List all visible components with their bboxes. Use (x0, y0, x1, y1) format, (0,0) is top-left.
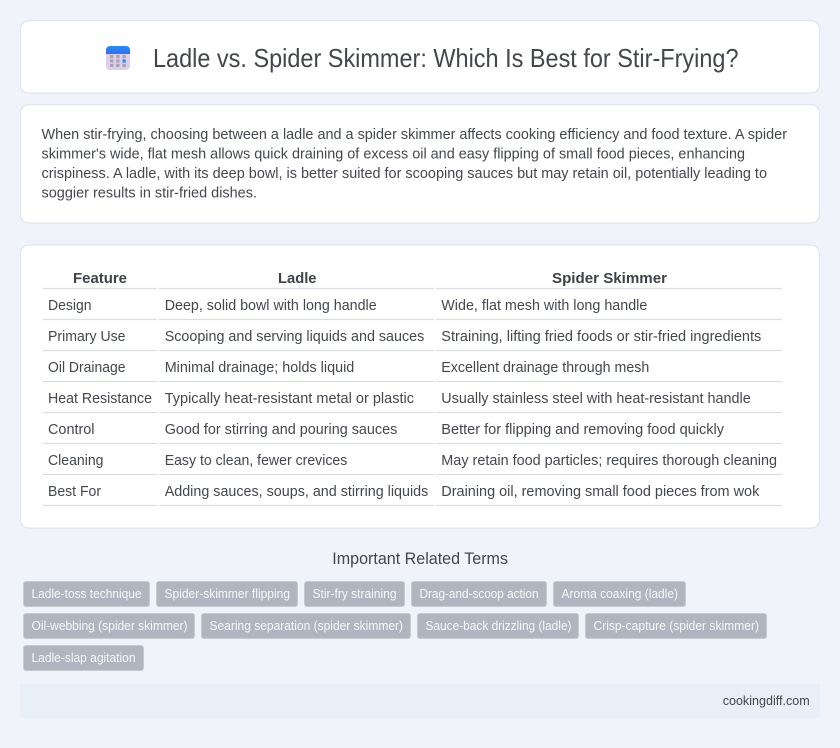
panel: related term tags (24, 582, 766, 670)
table row: best for (48, 484, 760, 500)
table row: cleaning: May retain food particles; requires thorough cleaning (441, 453, 777, 469)
table row: design: Wide, flat mesh with long handle (441, 298, 647, 314)
tag: Ladle-toss technique (32, 587, 142, 601)
table row: cleaning: Easy to clean, fewer crevices (165, 453, 347, 469)
table row: best for: Best For (48, 484, 101, 500)
footer (20, 684, 820, 718)
text block: introduction paragraph: When stir-frying, choosing between a ladle and a spider skimmer affects cooking efficiency and food texture. A spider (42, 127, 787, 143)
tag (586, 614, 766, 638)
table row: heat resistance: Usually stainless steel with heat-resistant handle (441, 391, 751, 407)
tag: Searing separation (spider skimmer) (210, 619, 403, 633)
table row: cleaning: Cleaning (48, 453, 104, 469)
tag: Oil-webbing (spider skimmer) (32, 619, 188, 633)
text block: introduction paragraph: skimmer's wide, flat mesh allows quick draining of excess oil and easy flipping of small food pieces, enhancing (42, 146, 745, 162)
table row: design: Design (48, 298, 92, 314)
tag (24, 614, 194, 638)
title: Ladle vs. Spider Skimmer: Which Is Best for Stir-Frying? (153, 45, 738, 73)
table row: primary use: Scooping and serving liquids and sauces (165, 329, 424, 345)
table row: heat resistance (48, 391, 751, 407)
table row: primary use (48, 329, 761, 345)
table header row: Ladle (278, 270, 316, 287)
panel: comparison table (21, 245, 819, 528)
table row: heat resistance: Typically heat-resistant metal or plastic (165, 391, 415, 407)
panel: introduction (21, 105, 819, 223)
table row: oil drainage: Excellent drainage through mesh (441, 360, 649, 376)
table row: design (48, 298, 647, 314)
table row: oil drainage: Minimal drainage; holds liquid (165, 360, 354, 376)
table row: primary use: Primary Use (48, 329, 126, 345)
tag: Drag-and-scoop action (420, 587, 538, 601)
table row: heat resistance: Heat Resistance (48, 391, 152, 407)
text block: introduction paragraph: crispiness. A ladle, with its deep bowl, is better suited for scooping sauces but may retain oil, potentially leading to (42, 166, 767, 182)
tag: Spider-skimmer flipping (164, 587, 290, 601)
table header row: Feature (73, 270, 127, 287)
table row: primary use: Straining, lifting fried foods or stir-fried ingredients (441, 329, 761, 345)
tag: Sauce-back drizzling (ladle) (426, 619, 572, 633)
tag (202, 614, 410, 638)
panel: title header (21, 21, 819, 93)
text block: introduction paragraph (42, 127, 787, 202)
tag (554, 582, 686, 606)
table row: design: Deep, solid bowl with long handle (165, 298, 377, 314)
table row: best for: Adding sauces, soups, and stirring liquids (165, 484, 428, 500)
tag (24, 582, 150, 606)
table row: best for: Draining oil, removing small food pieces from wok (441, 484, 760, 500)
tag (412, 582, 546, 606)
text block: introduction paragraph: soggier results in stir-fried dishes. (42, 186, 257, 202)
table header row (73, 270, 667, 287)
table row: oil drainage (48, 360, 649, 376)
heading: important related terms: Important Related Terms (332, 550, 508, 568)
tag: Crisp-capture (spider skimmer) (594, 619, 759, 633)
tag (156, 582, 298, 606)
icon: calendar (106, 46, 130, 70)
tag (304, 582, 404, 606)
table row: control: Better for flipping and removing food quickly (441, 422, 725, 438)
table row: oil drainage: Oil Drainage (48, 360, 126, 376)
tag: Stir-fry straining (312, 587, 396, 601)
footer: cookingdiff.com (723, 693, 810, 708)
table row: control: Good for stirring and pouring sauces (165, 422, 397, 438)
table row: control: Control (48, 422, 94, 438)
table row: control (48, 422, 725, 438)
table row: cleaning (48, 453, 777, 469)
tag (24, 646, 144, 670)
tag: Ladle-slap agitation (32, 651, 136, 665)
tag (418, 614, 578, 638)
tag: Aroma coaxing (ladle) (562, 587, 678, 601)
table header row: Spider Skimmer (552, 270, 667, 287)
